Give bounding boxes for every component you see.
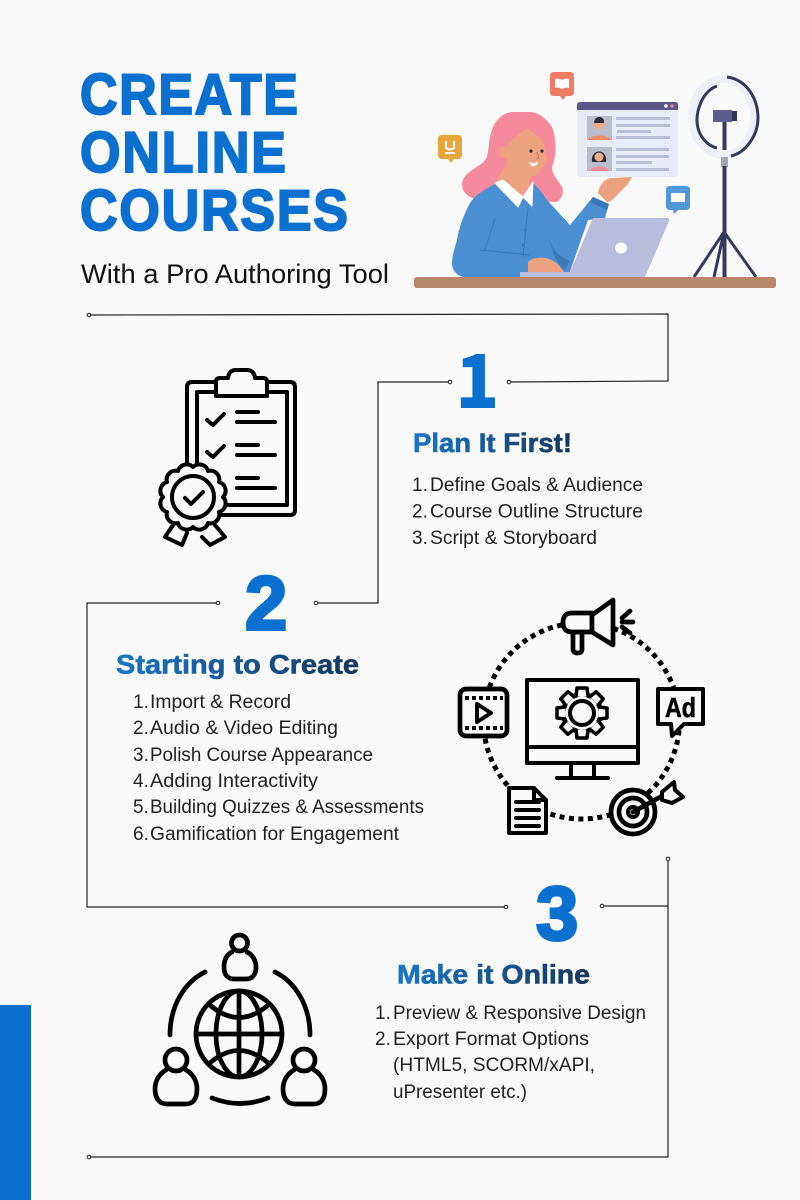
list: publishing steps bbox=[375, 1003, 646, 1103]
list: creation steps: 2. bbox=[133, 718, 149, 739]
title bbox=[80, 63, 348, 243]
ring light bbox=[692, 77, 758, 277]
icon: message bubble bbox=[666, 186, 690, 214]
list: creation steps: Audio & Video Editing bbox=[150, 718, 338, 739]
icon: clipboard with badge bbox=[160, 370, 295, 545]
number 1: 1 bbox=[456, 323, 498, 428]
list: plan steps: 2. bbox=[412, 502, 428, 522]
list: plan steps: Course Outline Structure bbox=[430, 502, 643, 522]
list: plan steps: 3. bbox=[412, 528, 428, 549]
dotted ring bbox=[484, 623, 680, 819]
list: publishing steps: Export Format Options bbox=[393, 1029, 589, 1050]
illustration: woman at laptop with ring light bbox=[414, 72, 776, 288]
heading: starting to create: Starting to Create bbox=[116, 650, 359, 680]
heading: make it online: Make it Online bbox=[397, 960, 590, 990]
collar bbox=[495, 180, 533, 207]
hands bbox=[528, 177, 632, 273]
number 3: 3 bbox=[536, 872, 578, 956]
list: creation steps: Import & Record bbox=[150, 692, 291, 713]
heading: plan it first: Plan It First! bbox=[413, 428, 572, 458]
table bbox=[414, 277, 776, 288]
list: creation steps: 5. bbox=[133, 797, 149, 818]
profile panel bbox=[577, 102, 678, 177]
list: creation steps: 4. bbox=[133, 771, 149, 792]
list: publishing steps: Preview & Responsive Design bbox=[393, 1003, 646, 1024]
list: plan steps: 1. bbox=[412, 475, 428, 496]
connector lines bbox=[87, 313, 670, 1159]
person right bbox=[283, 1049, 325, 1104]
list: publishing steps: 2. bbox=[375, 1029, 391, 1050]
person left bbox=[155, 1049, 197, 1104]
globe bbox=[196, 991, 282, 1077]
list: plan steps bbox=[412, 475, 643, 549]
list: publishing steps: 1. bbox=[375, 1003, 391, 1024]
icon: badge bubble bbox=[438, 135, 462, 163]
icon: ad bubble: Ad bbox=[665, 692, 696, 723]
title: COURSES bbox=[80, 179, 348, 243]
list: creation steps: 6. bbox=[133, 824, 149, 845]
connecting arcs bbox=[170, 972, 310, 1104]
subtitle: With a Pro Authoring Tool bbox=[81, 259, 389, 289]
person top bbox=[224, 935, 256, 979]
icon: globe with people bbox=[155, 935, 325, 1104]
title: ONLINE bbox=[80, 121, 286, 185]
icon: book bubble bbox=[550, 72, 574, 100]
monitor bbox=[527, 680, 638, 778]
list: creation steps: Polish Course Appearance bbox=[150, 745, 373, 766]
title: CREATE bbox=[80, 63, 298, 127]
accent bar bbox=[0, 1005, 31, 1200]
list: publishing steps: (HTML5, SCORM/xAPI, bbox=[393, 1055, 595, 1076]
list: creation steps: 3. bbox=[133, 745, 149, 766]
sweater bbox=[452, 183, 609, 277]
icon: target with arrow bbox=[611, 782, 683, 834]
list: creation steps: Adding Interactivity bbox=[150, 771, 319, 792]
list: plan steps: Define Goals & Audience bbox=[430, 475, 643, 496]
list: creation steps bbox=[133, 692, 424, 845]
neck and face bbox=[496, 128, 547, 200]
icon: video player bbox=[460, 689, 507, 736]
laptop bbox=[520, 218, 669, 277]
list: creation steps: Building Quizzes & Assessments bbox=[150, 797, 424, 818]
number 2: 2 bbox=[245, 562, 287, 646]
icon: ad bubble bbox=[658, 689, 703, 736]
icon: megaphone bbox=[563, 600, 633, 653]
icon: monitor with media ring bbox=[460, 600, 703, 834]
list: plan steps: Script & Storyboard bbox=[430, 528, 597, 549]
icon: document bbox=[509, 788, 546, 833]
hair bbox=[462, 112, 563, 202]
list: publishing steps: uPresenter etc.) bbox=[393, 1082, 527, 1103]
list: creation steps: Gamification for Engagement bbox=[150, 824, 400, 845]
list: creation steps: 1. bbox=[133, 692, 149, 713]
